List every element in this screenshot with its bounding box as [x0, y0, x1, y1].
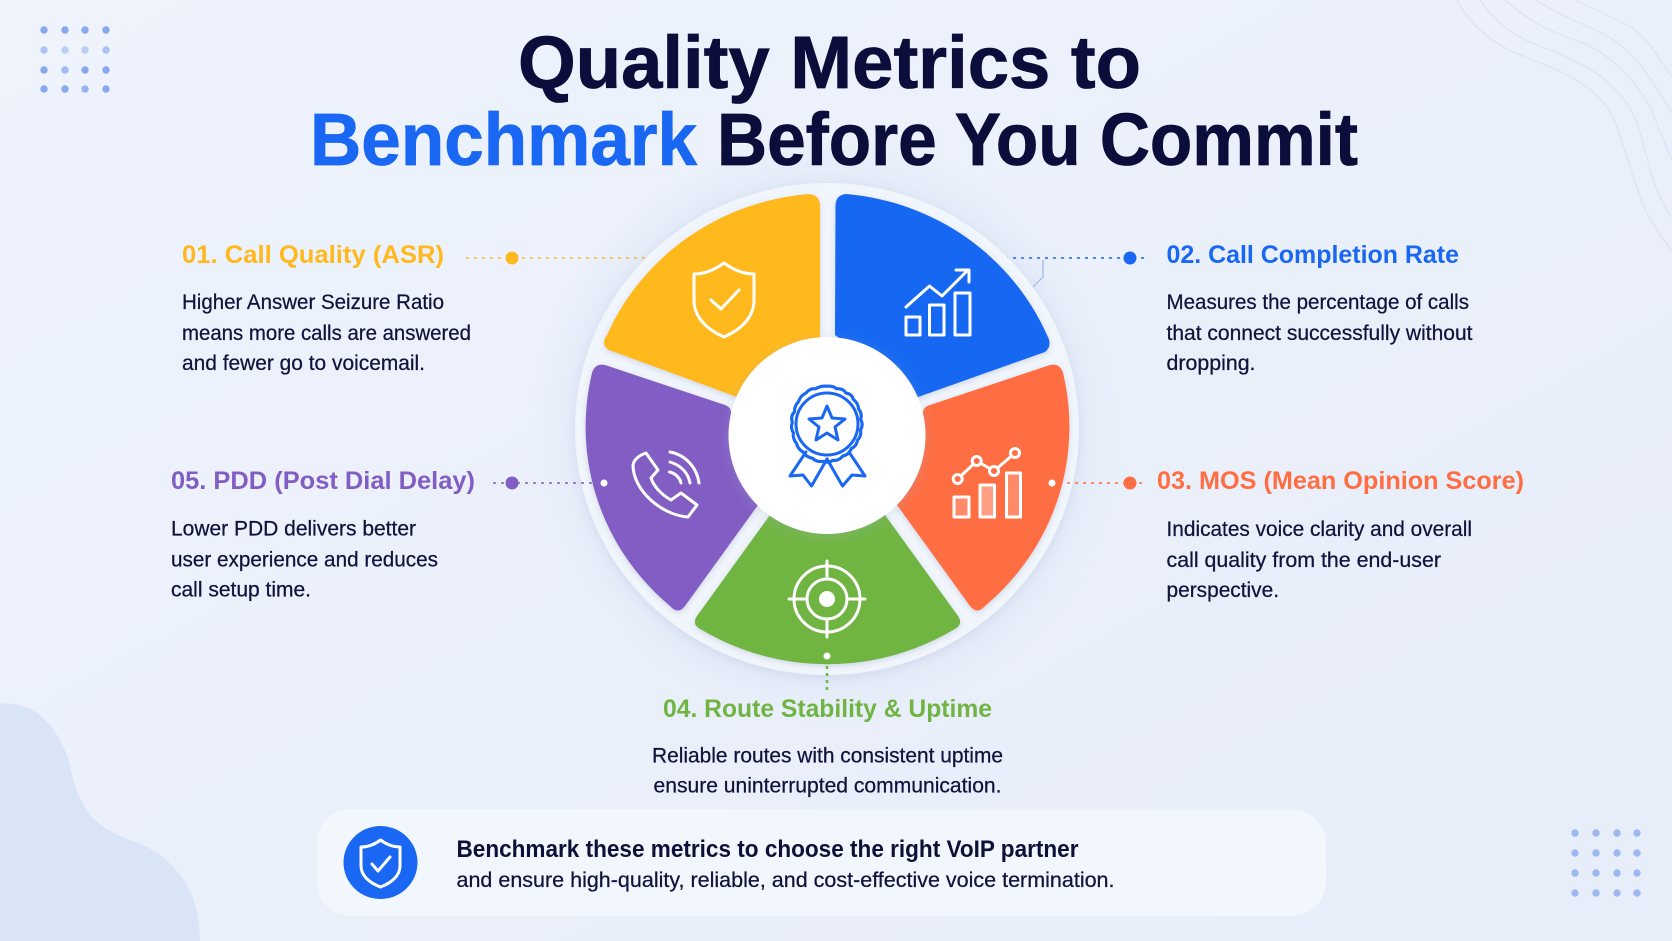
- icon: line and bars: [953, 448, 1020, 517]
- text block: 03 MOS: [1157, 467, 1524, 602]
- text block: 05 PDD: 05. PDD (Post Dial Delay): [171, 467, 475, 495]
- text block: 04 route stability: Reliable routes with consistent uptime: [652, 744, 1003, 768]
- icon: rising bar chart: [906, 270, 970, 335]
- connector: 05: [493, 476, 608, 490]
- text block: 03 MOS: Indicates voice clarity and overall: [1166, 518, 1472, 541]
- connector: 04: [824, 652, 830, 692]
- text block: 01 call quality: [182, 241, 471, 375]
- segment: orange MOS: [897, 365, 1069, 610]
- text block: 02 call completion: that connect successfully without: [1166, 322, 1473, 345]
- title: [310, 21, 1358, 181]
- text block: 01 call quality: Higher Answer Seizure Ratio: [182, 291, 444, 314]
- centre circle: [728, 337, 926, 534]
- callout text: [456, 836, 1114, 892]
- text block: 04 route stability: 04. Route Stability & Uptime: [663, 695, 992, 723]
- callout text: and ensure high-quality, reliable, and cost-effective voice termination.: [456, 869, 1114, 892]
- segment: green route stability: [695, 515, 960, 664]
- icon: award badge: [790, 386, 865, 486]
- text block: 01 call quality: and fewer go to voicemail.: [182, 352, 425, 375]
- connector: 01: [466, 252, 657, 264]
- background blob: [0, 704, 200, 941]
- icon: shield check: [694, 263, 754, 337]
- text block: 04 route stability: [652, 695, 1003, 798]
- text block: 01 call quality: means more calls are answered: [182, 322, 471, 345]
- icon: target: [789, 561, 865, 637]
- text block: 02 call completion: 02. Call Completion Rate: [1166, 241, 1459, 269]
- text block: 05 PDD: call setup time.: [171, 578, 311, 602]
- text block: 05 PDD: [171, 467, 475, 602]
- callout text: Benchmark these metrics to choose the right VoIP partner: [456, 836, 1078, 863]
- text block: 02 call completion: [1166, 241, 1473, 375]
- text block: 05 PDD: user experience and reduces: [171, 548, 438, 572]
- text block: 05 PDD: Lower PDD delivers better: [171, 518, 416, 540]
- text block: 03 MOS: 03. MOS (Mean Opinion Score): [1157, 467, 1524, 495]
- text block: 04 route stability: ensure uninterrupted communication.: [654, 774, 1002, 798]
- text block: 02 call completion: Measures the percentage of calls: [1166, 291, 1469, 314]
- title: Quality Metrics to: [518, 21, 1141, 104]
- segment: purple PDD: [586, 365, 758, 610]
- title: Before You Commit: [717, 98, 1358, 181]
- dot grid top left: [40, 26, 110, 93]
- connector: 03: [1048, 476, 1147, 490]
- wheel ring: [575, 183, 1079, 675]
- text block: 03 MOS: call quality from the end-user: [1166, 549, 1441, 572]
- icon: phone with signal: [633, 452, 699, 517]
- connector: 02: [1005, 252, 1148, 287]
- icon: shield badge: [344, 826, 418, 899]
- callout bar: [317, 809, 1326, 916]
- text block: 03 MOS: perspective.: [1166, 579, 1279, 602]
- text block: 02 call completion: dropping.: [1166, 352, 1256, 375]
- segment: yellow call quality: [604, 194, 820, 397]
- text block: 01 call quality: 01. Call Quality (ASR): [182, 241, 444, 269]
- wheel halo: [529, 132, 1125, 728]
- dot grid bottom right: [1571, 829, 1641, 897]
- title: Benchmark: [310, 98, 698, 181]
- background wave lines: [1457, 0, 1672, 250]
- segment: blue call completion: [835, 194, 1050, 397]
